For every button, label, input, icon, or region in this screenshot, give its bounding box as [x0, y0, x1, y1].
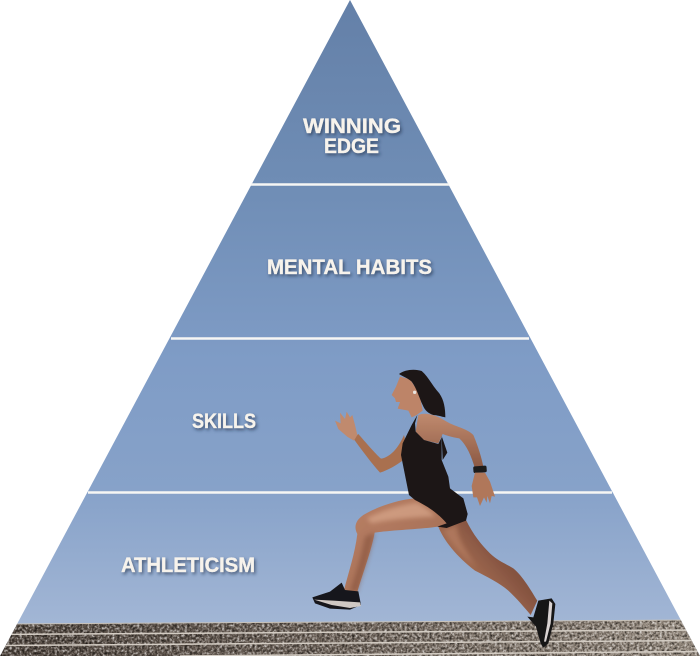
tank top and shorts — [401, 415, 468, 528]
front leg highlight — [367, 503, 435, 523]
front leg — [344, 498, 447, 592]
rear hand — [472, 473, 495, 506]
front arm — [353, 434, 406, 473]
rear leg — [438, 519, 537, 615]
rear arm and shoulder — [416, 414, 483, 469]
tier label: mental habits: MENTAL HABITS — [267, 256, 432, 279]
watch — [473, 466, 487, 473]
rear shoe — [527, 598, 555, 648]
tier label: winning edge — [303, 115, 401, 158]
front shin shading — [350, 533, 375, 592]
tier dividers — [88, 184, 612, 492]
tier label: skills: SKILLS — [192, 410, 256, 433]
neck and face — [392, 377, 423, 417]
front shoe — [312, 583, 361, 610]
earbud — [413, 391, 416, 394]
hair — [399, 370, 447, 460]
tier label: athleticism: ATHLETICISM — [121, 554, 255, 577]
tier label: winning edge: WINNING — [303, 115, 401, 138]
tier label: winning edge: EDGE — [324, 135, 379, 158]
stone stairs — [0, 620, 700, 656]
front hand — [335, 412, 357, 441]
runner — [312, 370, 555, 648]
rear leg highlight — [443, 525, 477, 567]
